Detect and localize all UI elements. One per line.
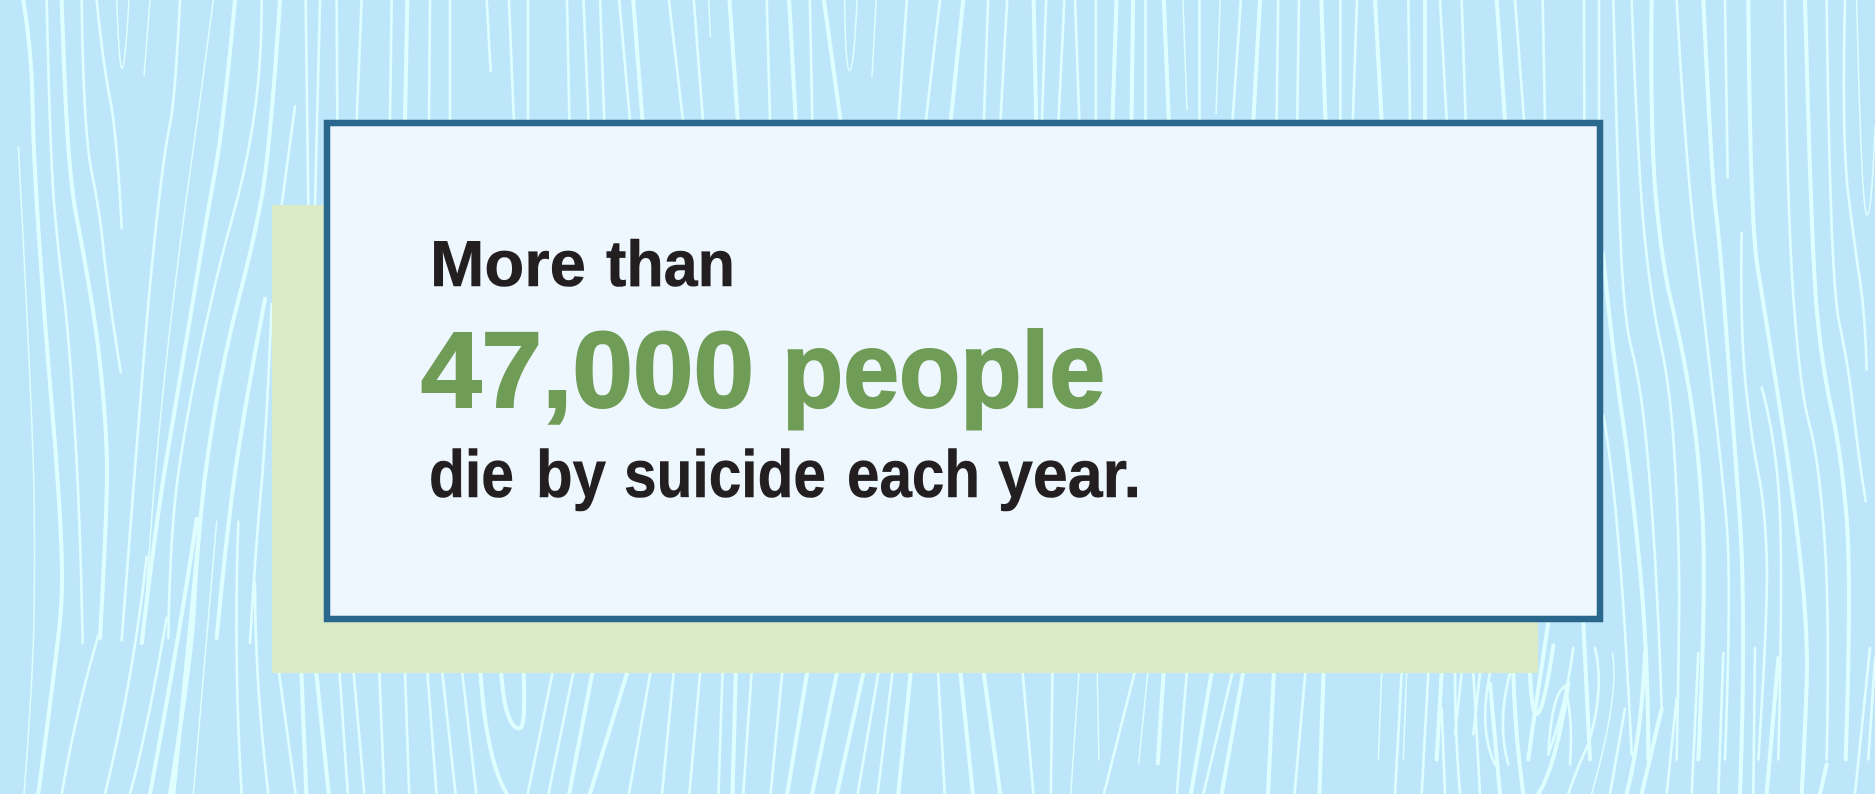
text: highlighted statistic: people [782, 309, 1105, 430]
text: lead-in line: More [430, 227, 586, 300]
text: closing line: die [429, 437, 514, 512]
text: closing line: year. [998, 437, 1141, 512]
offset green shadow panel [272, 205, 1538, 673]
main callout panel with blue border [327, 123, 1600, 619]
text: lead-in line: than [606, 227, 735, 300]
text: closing line: suicide [624, 437, 826, 512]
callout text [421, 227, 1141, 512]
text: closing line: by [536, 437, 606, 512]
text: highlighted statistic: 47,000 [421, 309, 754, 430]
text: closing line: each [847, 437, 980, 512]
